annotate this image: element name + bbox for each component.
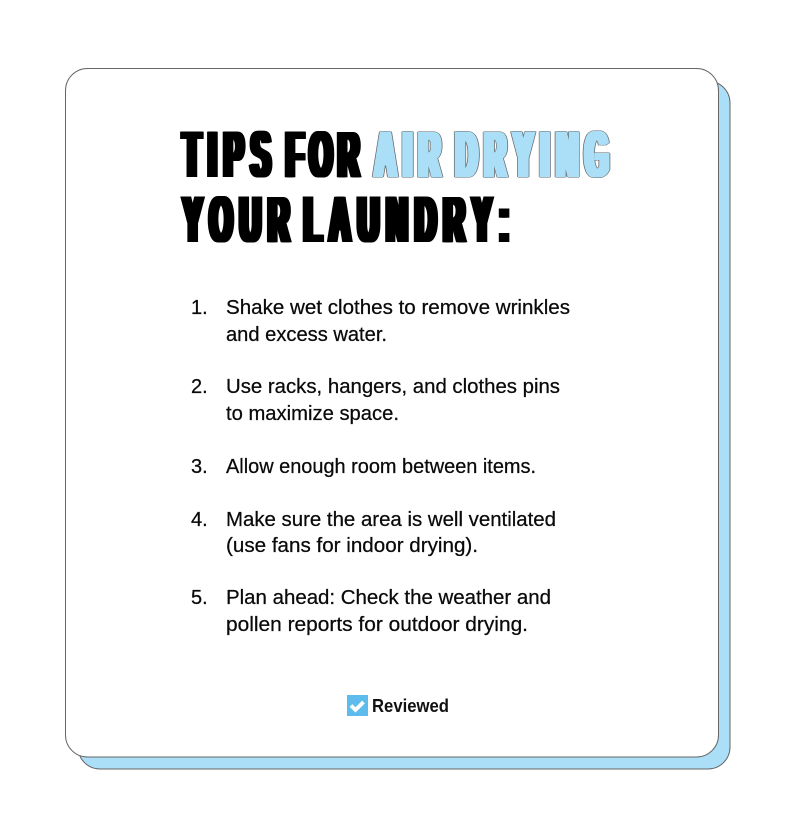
logo: Reviewed: Reviewed [372, 696, 449, 716]
title [180, 117, 616, 256]
tip 2 [191, 376, 560, 425]
tip 4: Make sure the area is well ventilated [226, 509, 556, 531]
tip 1 [191, 297, 570, 346]
icon: check box [347, 695, 368, 716]
main card panel [66, 68, 718, 757]
tip 2: 2. [191, 376, 208, 398]
tip 2: to maximize space. [226, 403, 399, 425]
tip 3: 3. [191, 456, 208, 478]
title: DRYING [456, 117, 616, 191]
tip 1: and excess water. [226, 324, 387, 346]
title: LAUNDRY: [304, 182, 517, 256]
title: TIPS [183, 117, 278, 191]
tip 4: 4. [191, 509, 208, 531]
title: FOR [286, 117, 365, 191]
tip 2: Use racks, hangers, and clothes pins [226, 376, 560, 398]
title: YOUR [183, 182, 297, 256]
tip 5 [191, 587, 551, 636]
tip 3: Allow enough room between items. [226, 456, 536, 478]
tip 1: Shake wet clothes to remove wrinkles [226, 297, 570, 319]
tip 4: (use fans for indoor drying). [226, 535, 478, 557]
tips list [191, 297, 570, 636]
title: AIR [375, 117, 448, 191]
tip 5: Plan ahead: Check the weather and [226, 587, 551, 609]
tip 5: pollen reports for outdoor drying. [226, 614, 528, 636]
tip 1: 1. [191, 297, 208, 319]
tip 5: 5. [191, 587, 208, 609]
tip 4 [191, 509, 556, 557]
card shadow [78, 81, 730, 769]
logo: Reviewed [347, 695, 449, 716]
